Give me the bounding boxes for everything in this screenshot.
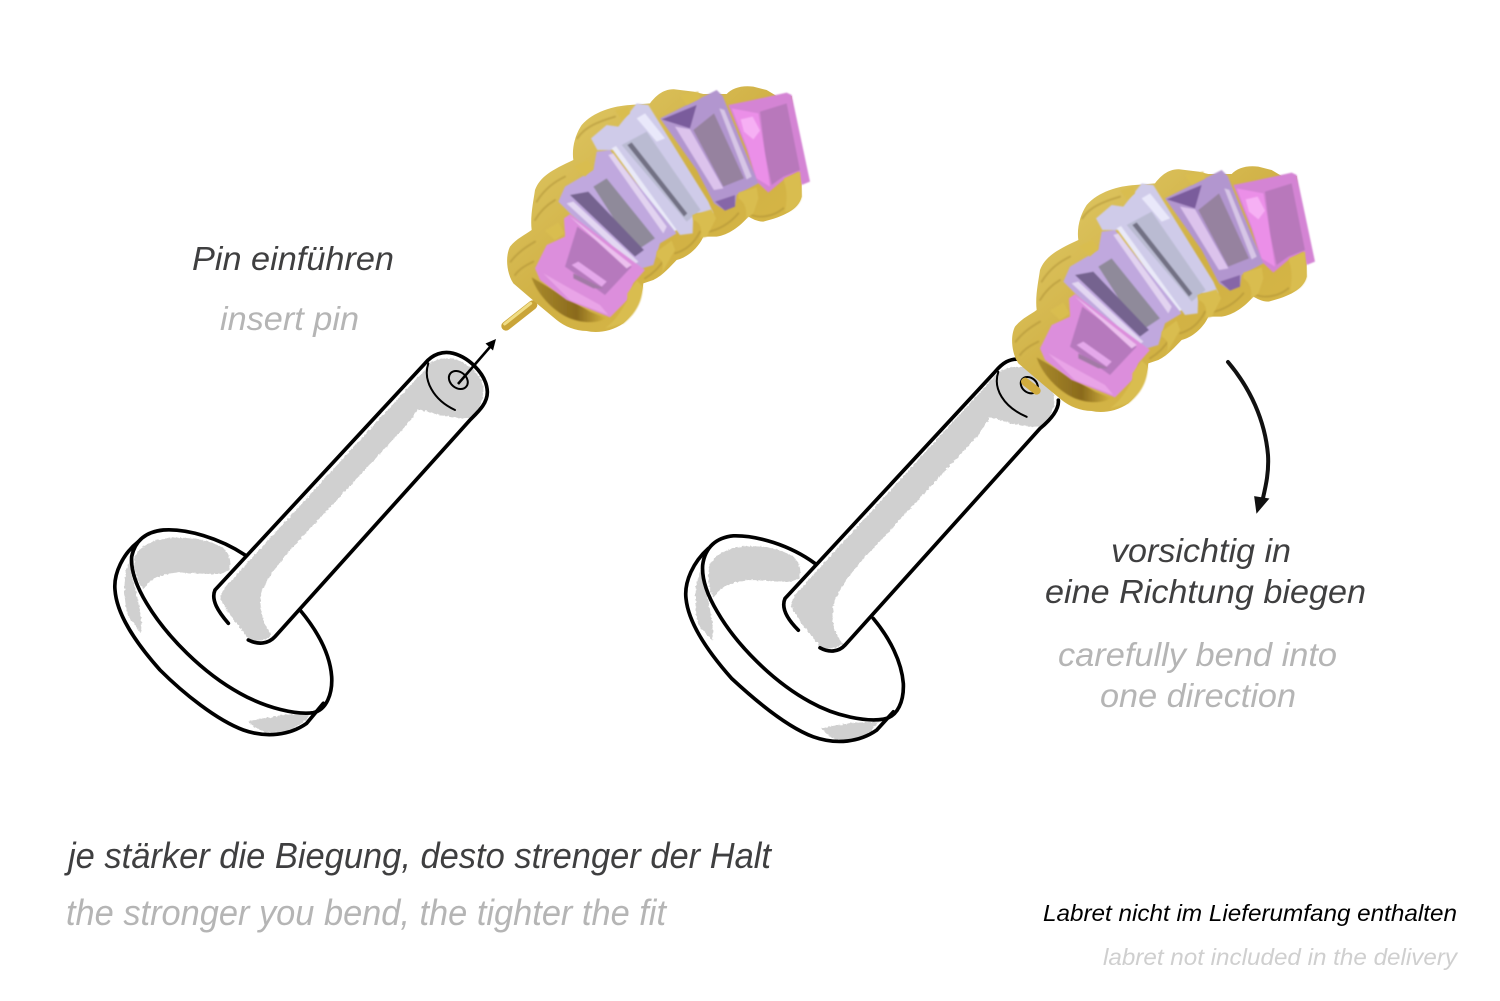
gem 2 violet xyxy=(1063,230,1182,350)
gems xyxy=(535,90,810,317)
gold pin xyxy=(505,303,533,326)
labret shading xyxy=(695,367,1054,740)
dark bottom band xyxy=(1037,357,1112,402)
gem 4 purple xyxy=(1165,170,1263,291)
gems xyxy=(1040,170,1315,397)
text: Labret nicht im Lieferumfang enthalten: Labret nicht im Lieferumfang enthalten xyxy=(1043,900,1457,926)
labret shading xyxy=(124,358,483,733)
labret outline xyxy=(115,352,487,735)
text: labret not included in the delivery: labret not included in the delivery xyxy=(1103,944,1459,970)
labret outline xyxy=(686,359,1058,741)
text: Pin einführen: Pin einführen xyxy=(192,240,394,277)
gem 5 pink xyxy=(728,93,810,193)
gem 1 pink xyxy=(535,214,645,317)
gold ridges xyxy=(511,117,783,278)
gem 3 lavender xyxy=(591,103,713,235)
labret right xyxy=(686,359,1058,741)
text: je stärker die Biegung: je stärker die Biegung, desto strenger der Halt xyxy=(63,835,773,876)
gold prongs xyxy=(545,92,802,328)
text: eine Richtung biegen: eine Richtung biegen xyxy=(1045,573,1366,610)
gem 1 pink xyxy=(1040,294,1150,397)
text: the stronger you bend: the stronger you bend, the tighter the fit xyxy=(66,892,668,933)
labret left xyxy=(115,352,487,735)
text: carefully bend into: carefully bend into xyxy=(1058,636,1337,673)
gem piece right xyxy=(1012,166,1315,412)
gem 3 lavender xyxy=(1096,183,1218,315)
gem 4 purple xyxy=(660,90,758,211)
gem 2 violet xyxy=(558,150,677,270)
gold ridges xyxy=(1016,197,1288,358)
gold setting xyxy=(507,86,802,332)
gold prongs xyxy=(1050,172,1307,408)
arrow: bend direction xyxy=(1228,362,1268,512)
gem piece left xyxy=(505,86,810,332)
text: vorsichtig in: vorsichtig in xyxy=(1111,532,1291,569)
gem 5 pink xyxy=(1233,173,1315,273)
gold setting xyxy=(1012,166,1307,412)
gold pin xyxy=(1025,382,1037,391)
text: insert pin: insert pin xyxy=(220,300,359,337)
arrow: insert direction xyxy=(458,339,496,384)
text: one direction: one direction xyxy=(1100,677,1296,714)
dark bottom band xyxy=(532,277,607,322)
